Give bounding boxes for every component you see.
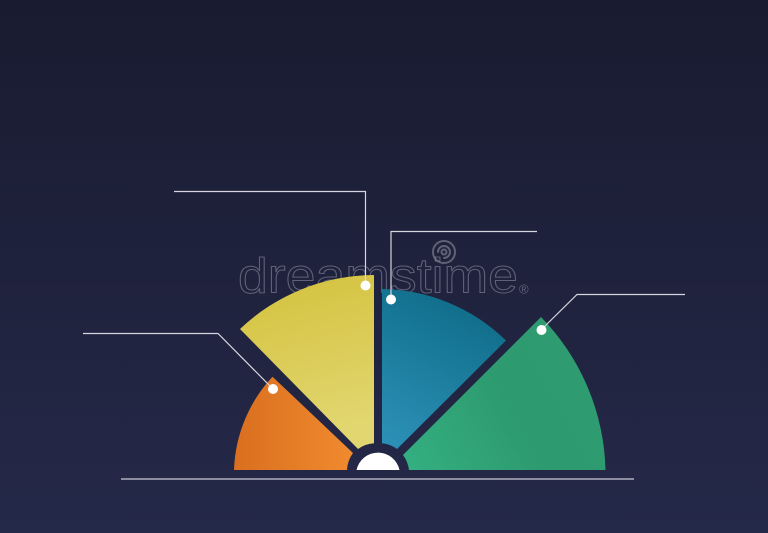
callout: yellow [174, 192, 370, 290]
watermark [238, 241, 529, 304]
callout: orange [83, 334, 278, 394]
segment: green [403, 317, 606, 470]
segment: orange [234, 377, 353, 470]
segment: yellow [240, 275, 374, 449]
callout: blue [386, 232, 537, 304]
watermark text: dreamstime [238, 250, 518, 304]
watermark spiral [433, 241, 455, 263]
center white semicircle [356, 453, 400, 470]
segment: blue [382, 289, 506, 449]
baseline [121, 478, 634, 480]
registered mark: ® [519, 282, 529, 296]
callout: green [536, 294, 685, 335]
